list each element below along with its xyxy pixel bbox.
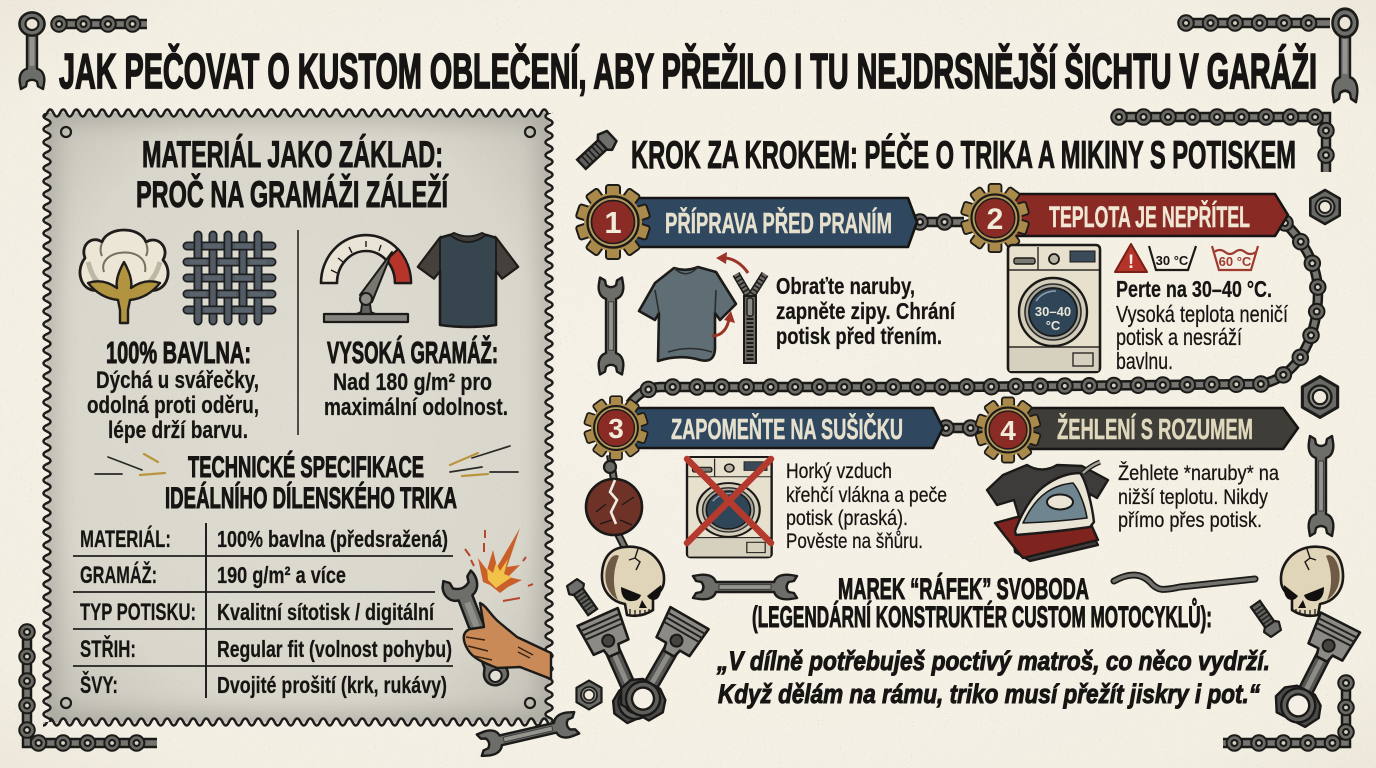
- ribbon: [635, 408, 943, 448]
- row: gramáž: 190 g/m² a více: [217, 562, 346, 588]
- chain connecting steps 2 and 3: [630, 223, 1318, 404]
- text: 100% bavlna: Dýchá u svářečky,: [96, 367, 259, 394]
- step text: Perte na 30–40 °C.: [1116, 276, 1272, 302]
- icon: hand with wrench and spark: [440, 528, 551, 691]
- step text: přímo přes potisk.: [1118, 509, 1262, 532]
- step text: potisk a nesráží: [1116, 324, 1242, 350]
- ornament: bottom-right chain: [1223, 683, 1346, 743]
- step text: Pověste na šňůru.: [786, 530, 923, 553]
- gear badge: 3: [608, 413, 624, 444]
- ribbon: [1010, 194, 1288, 236]
- icon: zipper with arrows: [712, 252, 765, 363]
- specs heading: IDEÁLNÍHO DÍLENSKÉHO TRIKA: [165, 481, 457, 515]
- rivets: [61, 127, 535, 708]
- step 2: teplota je nepřítel: [961, 184, 1288, 374]
- icon: warning triangle: [1115, 244, 1147, 273]
- row: švy: [80, 671, 447, 699]
- quote: Když dělám na rámu, triko musí přežít jiskry i pot.“: [718, 679, 1260, 709]
- text: 100% bavlna: 100% BAVLNA:: [106, 335, 251, 370]
- step text: Vysoká teplota neničí: [1116, 301, 1288, 327]
- step text: Horký vzduch: [786, 460, 892, 483]
- gear badge: 4: [1000, 415, 1016, 446]
- quote: [716, 646, 1270, 709]
- icon: washing machine: 30–40: [1035, 304, 1071, 319]
- gear badge: 1: [604, 205, 622, 240]
- row: švy: ŠVY:: [80, 671, 118, 699]
- quote: „V dílně potřebuješ poctivý matroš, co něco vydrží.: [716, 646, 1270, 676]
- text: 100% bavlna: lépe drží barvu.: [108, 417, 248, 444]
- ribbon: [630, 198, 917, 247]
- gear badge: [584, 396, 648, 460]
- icon: wash symbol 60: 60 °C: [1219, 254, 1252, 269]
- specs table: [73, 523, 453, 699]
- icon: washing machine: °C: [1046, 318, 1061, 333]
- icon: bent bar: [1114, 575, 1255, 589]
- step text: [1118, 462, 1279, 532]
- panel heading: PROČ NA GRAMÁŽI ZÁLEŽÍ: [136, 173, 449, 215]
- icon: bottom wrench: [477, 711, 579, 757]
- row: materiál: 100% bavlna (předsražená): [217, 526, 448, 552]
- row: střih: Regular fit (volnost pohybu): [217, 636, 452, 662]
- icon: skull left: [602, 547, 664, 616]
- ribbon label: PŘÍPRAVA PŘED PRANÍM: [665, 206, 892, 240]
- row: typ potisku: Kvalitní sítotisk / digitální: [217, 599, 435, 625]
- icon: navy t-shirt: [418, 233, 518, 327]
- icon: wash symbol 60: [1212, 246, 1258, 270]
- panel heading: [136, 134, 449, 215]
- icon: wash symbol 30: [1149, 246, 1196, 270]
- quote attribution: [752, 572, 1212, 634]
- row: typ potisku: [80, 599, 435, 626]
- icon: bolt left: [565, 577, 600, 617]
- row: švy: Dvojité prošití (krk, rukávy): [217, 672, 447, 698]
- text: 100% bavlna: odolná proti oděru,: [87, 392, 259, 419]
- step text: potisk (praská).: [786, 507, 908, 530]
- icon: iron on shirts: [987, 462, 1108, 561]
- step 4: žehlení s rozumem: [975, 397, 1298, 561]
- step text: bavlnu.: [1116, 348, 1173, 374]
- gear badge: 2: [987, 203, 1003, 236]
- step text: [786, 460, 947, 553]
- row: typ potisku: TYP POTISKU:: [80, 599, 196, 626]
- ribbon label: ZAPOMEŇTE NA SUŠIČKU: [671, 412, 903, 446]
- text: vysoká gramáž: maximální odolnost.: [324, 394, 508, 421]
- panel plate: [40, 106, 556, 729]
- icon: bolt right: [1248, 599, 1283, 639]
- icon: crossed pistons: [576, 606, 710, 727]
- row: střih: [80, 635, 452, 663]
- gear badge: [576, 185, 650, 259]
- step text: Žehlete *naruby* na: [1118, 462, 1279, 485]
- icon: heading bolt: [574, 128, 619, 172]
- step text: potisk před třením.: [776, 323, 942, 349]
- step text: zapněte zipy. Chrání: [776, 298, 956, 324]
- icon: warning triangle: !: [1128, 252, 1134, 273]
- icon: nut upper right: [1310, 190, 1340, 224]
- text: vysoká gramáž: VYSOKÁ GRAMÁŽ:: [327, 334, 498, 370]
- step 1: příprava před praním: [576, 185, 956, 374]
- chain connecting steps 3 and 4: [946, 427, 985, 429]
- connector and cracked link: [586, 455, 642, 552]
- row: gramáž: GRAMÁŽ:: [80, 561, 157, 589]
- specs heading: [165, 450, 457, 515]
- step 3: zapomeňte na sušičku: [584, 396, 947, 557]
- step text: křehčí vlákna a peče: [786, 484, 947, 507]
- row: materiál: [80, 525, 448, 553]
- icon: nut lower left: [577, 681, 601, 709]
- icon: skull right: [1281, 547, 1343, 616]
- step text: [1116, 276, 1288, 374]
- step text: nižší teplotu. Nikdy: [1118, 486, 1268, 509]
- row: gramáž: [80, 561, 346, 589]
- text: 100% bavlna: [87, 335, 259, 444]
- sparks beside specs heading: [95, 446, 518, 476]
- chain connecting steps 1 and 2: [920, 221, 964, 223]
- text: vysoká gramáž: [324, 334, 508, 421]
- ornament: bottom-left chain: [27, 632, 157, 743]
- icon: cotton boll: [80, 230, 168, 323]
- icon: wrench lower: [693, 575, 797, 599]
- icon: wrench right: [1309, 436, 1333, 536]
- step text: Obraťte naruby,: [776, 273, 915, 299]
- row: střih: STŘIH:: [80, 635, 136, 663]
- ribbon label: ŽEHLENÍ S ROZUMEM: [1057, 412, 1253, 446]
- ornament: top-left wrench and chain: [20, 12, 147, 89]
- divider: [297, 230, 299, 435]
- panel heading: MATERIÁL JAKO ZÁKLAD:: [142, 134, 443, 175]
- row: materiál: MATERIÁL:: [80, 525, 171, 553]
- icon: wash symbol 30: 30 °C: [1156, 253, 1189, 268]
- text: vysoká gramáž: Nad 180 g/m² pro: [333, 369, 492, 396]
- icon: washing machine: [1008, 245, 1100, 372]
- icon: piston right: [1269, 612, 1362, 731]
- step text: [776, 273, 956, 349]
- icon: grey t-shirt: [639, 267, 736, 361]
- quote attribution: MAREK “RÁFEK” SVOBODA: [838, 572, 1089, 606]
- icon: wrench: [599, 278, 623, 374]
- icon: fabric weave: [187, 235, 272, 321]
- ornament: upper right chain: [1119, 117, 1326, 172]
- gear badge: [975, 397, 1041, 463]
- icon: crossed-out dryer: [687, 457, 772, 557]
- specs heading: TECHNICKÉ SPECIFIKACE: [188, 450, 424, 484]
- ribbon: [1025, 408, 1298, 449]
- icon: nut middle right: [1302, 377, 1338, 417]
- ornament: top-right wrench and chain: [1186, 9, 1358, 102]
- gear badge: [961, 184, 1029, 252]
- icon: gauge: [321, 235, 411, 322]
